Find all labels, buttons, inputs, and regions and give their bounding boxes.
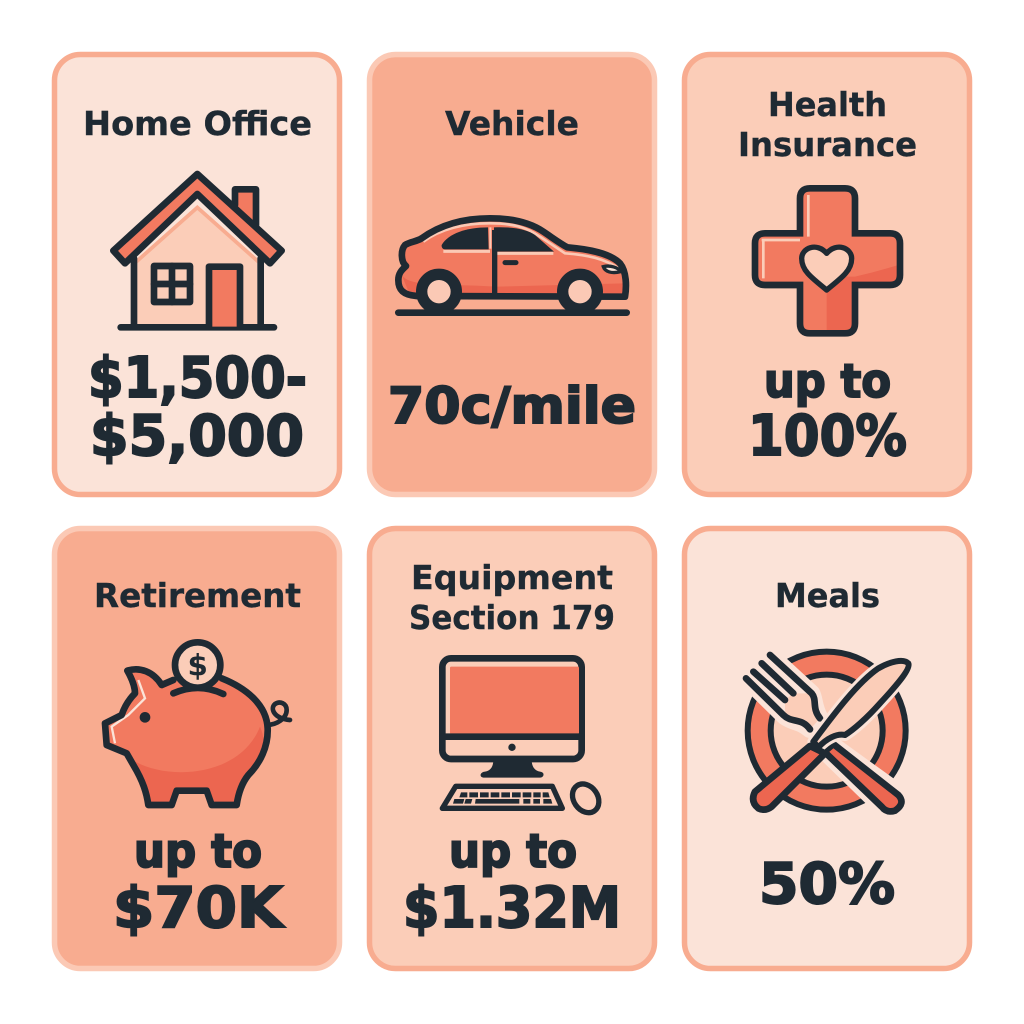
value: vehicle: 70c/mile [388,377,636,435]
value: 100%: 100% [748,404,907,469]
heading: section 179: Section 179 [409,598,615,637]
heading: meals: Meals [775,576,880,615]
value: 50%: 50% [759,852,895,917]
icon: car [398,218,627,313]
panel: home office [54,54,340,494]
value: up to: up to [134,824,262,878]
value: up to: up to [449,824,577,878]
value line two: home office: $5,000 [90,404,304,469]
panel: health insurance [684,54,970,494]
value: $1.32M: $1.32M [403,876,621,941]
heading: insurance: Insurance [738,125,917,164]
heading: retirement: Retirement [94,576,301,615]
coin dollar sign: $ [187,649,208,683]
value: up to: up to [764,354,891,408]
icon: medical cross with heart [755,188,900,333]
knife [753,661,909,810]
icon: house [113,174,282,327]
value: $70K: $70K [113,876,286,941]
value: home office: $1,500- [88,346,307,411]
icon: plate with fork and knife [746,652,909,811]
fork [746,655,902,811]
icon: computer [442,658,604,818]
heading: vehicle: Vehicle [445,104,579,143]
heading: home office: Home Office [83,104,312,143]
panel: equipment section 179 [370,528,654,968]
heading: health: Health [768,85,887,124]
panel: vehicle [370,54,654,494]
icon: piggy bank [105,642,290,805]
heading: equipment: Equipment [411,558,613,597]
panel: meals [684,528,970,968]
panel: retirement [54,528,340,968]
